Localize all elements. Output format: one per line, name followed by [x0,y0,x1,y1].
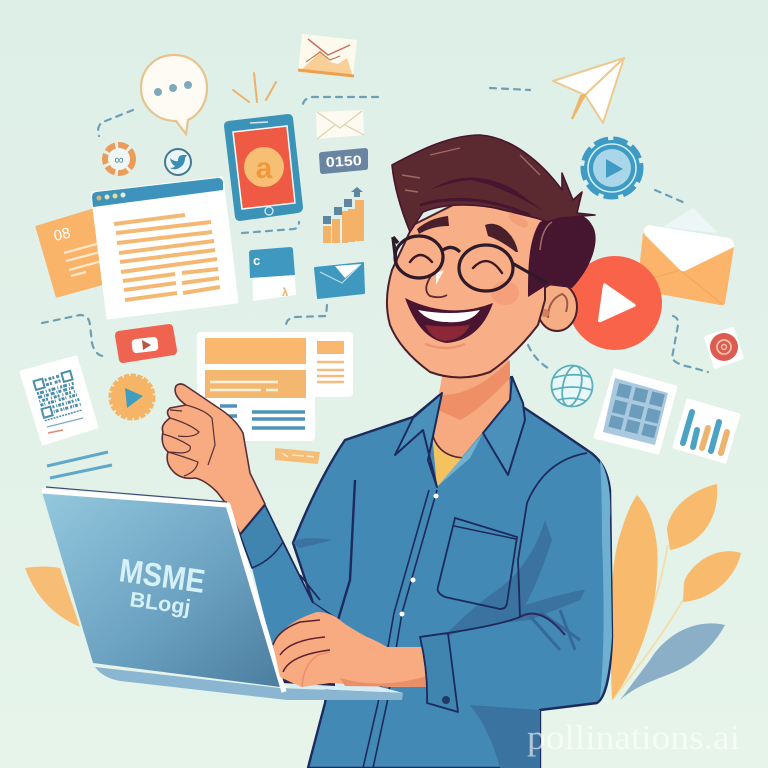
dashed connector lines [42,88,708,372]
icon: bar chart card [674,400,739,462]
icon: small blue and white card [249,247,296,301]
icon: YouTube button [115,324,177,363]
typing hand [273,612,427,687]
icon: open orange envelope [637,208,734,305]
icon: orange gear badge [105,145,133,173]
icon: smartphone [224,114,303,221]
panel: right leaves [610,484,741,700]
icon: growth bars [323,187,364,243]
icon: orange note card: 08 [52,225,72,245]
icon: grid card [595,370,676,453]
icon: paper plane [553,58,624,123]
pocket [438,518,517,609]
icon: small blue and white card: λ [282,287,288,299]
figure: shirt body [293,377,612,768]
icon: blue envelope [315,263,364,298]
figure: shirt collar [395,377,525,487]
icon: orange note card [37,210,104,296]
right shirt cuff [420,633,458,712]
panel: web page layout [197,332,353,441]
figure: ear [537,283,577,331]
decorative text lines [47,452,112,478]
icon: blue gear with play [584,140,640,196]
icon: sparks above phone [233,73,276,102]
figure: hair [392,135,596,297]
raised hand [162,384,265,534]
icon: smartphone: a [256,152,273,185]
icon: chart card [298,34,357,77]
laptop: BLogj [128,588,192,619]
panel: browser window [92,178,237,318]
icon: red play circle [568,256,662,350]
nose [426,276,447,297]
figure: glasses [393,236,547,291]
eyes [410,255,502,273]
icon: globe [552,364,592,408]
icon: small blue and white card: c [253,253,260,268]
icon: number badge [319,148,368,174]
icon: swirl card [705,328,743,368]
watermark: pollinations.ai [527,718,740,757]
laptop lid [42,492,280,687]
eyebrows [417,216,449,234]
icon: number badge: 0150 [325,152,362,170]
laptop [42,487,403,700]
icon: play badge [111,376,153,418]
placket [363,490,437,768]
mouth [405,298,493,343]
icon: twitter circle [165,149,191,175]
laptop label text: MSME [117,551,207,600]
icon: left leaf [25,566,80,627]
right arm seams [420,453,587,637]
shirt shadows [440,520,585,768]
figure: raised arm sleeve [240,505,340,690]
figure: face [387,200,545,378]
figure: neck and t-shirt [432,345,510,487]
icon: orange gear badge: ∞ [114,152,124,167]
icon: small white envelope [316,110,364,139]
laptop base [95,667,403,700]
icon: QR code card [21,357,97,444]
icon: small orange tag [275,448,320,464]
icon: speech bubble [141,55,207,134]
